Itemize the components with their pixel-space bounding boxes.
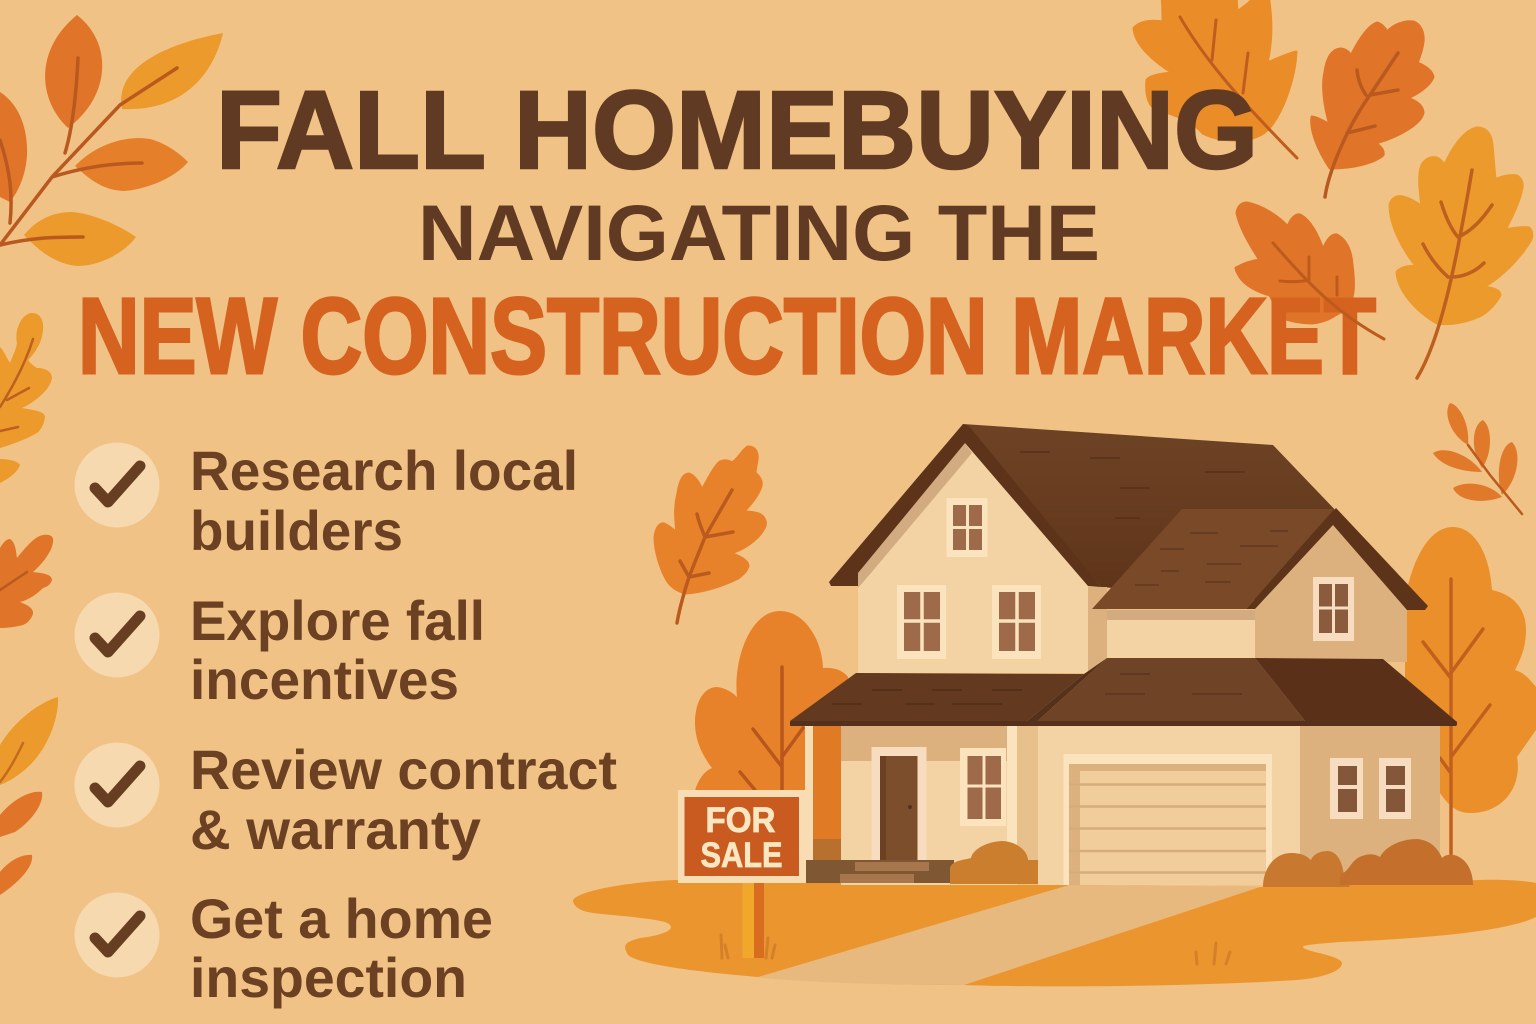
sign post [742,880,764,958]
lower wall: porch recess [841,726,1038,885]
check item: review contract and warranty [74,738,617,861]
check item: get a home inspection: inspection [190,946,467,1009]
wall shadow [858,443,972,588]
oak leaf veins: over market heading [1273,243,1384,339]
checklist [74,439,617,1009]
shrub by porch [950,841,1038,884]
leaf branch: top left [0,15,223,266]
driveway path [758,885,1260,985]
sign text: SALE [700,836,782,875]
oak leaf: top centre right, amber [1134,0,1297,158]
sign board [678,790,806,883]
left gable barge [829,424,1101,587]
tree: left of house [693,611,860,800]
tree: right of house [1405,527,1536,880]
oak leaf: behind market heading [1236,203,1354,323]
check item: explore fall incentives [74,589,485,711]
porch window [960,748,1006,826]
leaf: left edge, orange oak [0,535,53,628]
check item: review contract and warranty: Review contract [190,738,617,801]
right gable barge [1246,508,1428,610]
side window left [1330,758,1363,819]
check item: explore fall incentives: incentives [190,648,459,711]
check item: get a home inspection: Get a home [190,887,493,950]
porch side shadow [1017,726,1038,885]
front door [872,747,926,860]
main title [78,69,1376,396]
sign panel [684,797,799,876]
oak leaf: floating centre [655,447,765,623]
grass tufts [721,935,1230,964]
leaf branch: right side small [1433,403,1522,514]
secondary roof [1092,509,1334,609]
check item: explore fall incentives: Explore fall [190,589,485,652]
lawn [573,880,1536,986]
porch orange gap [813,726,841,839]
porch gap base [813,839,841,861]
check item: research local builders: Research local [190,439,578,502]
right gable wall [1255,525,1407,662]
roof eave line [790,721,1457,726]
centre wall shadow [1107,610,1255,620]
check item: get a home inspection [74,887,493,1009]
oak leaf: far right, yellow [1390,128,1532,378]
porch steps [806,860,954,883]
sign text: FOR [706,801,776,840]
garage block [1038,726,1300,885]
centre wall band [1107,610,1255,658]
title line: navigating the: NAVIGATING THE [418,188,1100,277]
sign text [700,801,782,875]
right gable window [1313,577,1354,641]
leaves: left edge, lower sprig [0,697,58,895]
lower right roof, dark part [1255,658,1457,726]
upper window right [992,585,1041,659]
porch upper shadow [841,726,1038,761]
porch post right [1007,726,1017,861]
lower left roof [790,673,1084,726]
upper main roof [963,424,1340,600]
lower centre roof [1032,658,1309,726]
leaf cluster: left edge, yellow oak [0,313,52,483]
roof valley [1021,658,1107,726]
title line: fall homebuying: FALL HOMEBUYING [216,69,1258,192]
oak leaf: top right, orange [1312,22,1433,197]
garage door [1064,754,1272,885]
for sale sign [678,790,806,958]
left gable wall [858,443,1088,673]
porch post left [805,726,813,861]
house [790,424,1473,887]
check item: research local builders: builders [190,499,403,562]
upper window left [897,585,946,659]
side wall shadow [1088,587,1107,673]
right wing wall [1300,726,1440,885]
check item: research local builders [74,439,578,562]
attic window [946,498,988,557]
shrubs by garage [1263,839,1473,887]
check item: review contract and warranty: & warranty [190,798,481,861]
side window right [1379,758,1411,819]
